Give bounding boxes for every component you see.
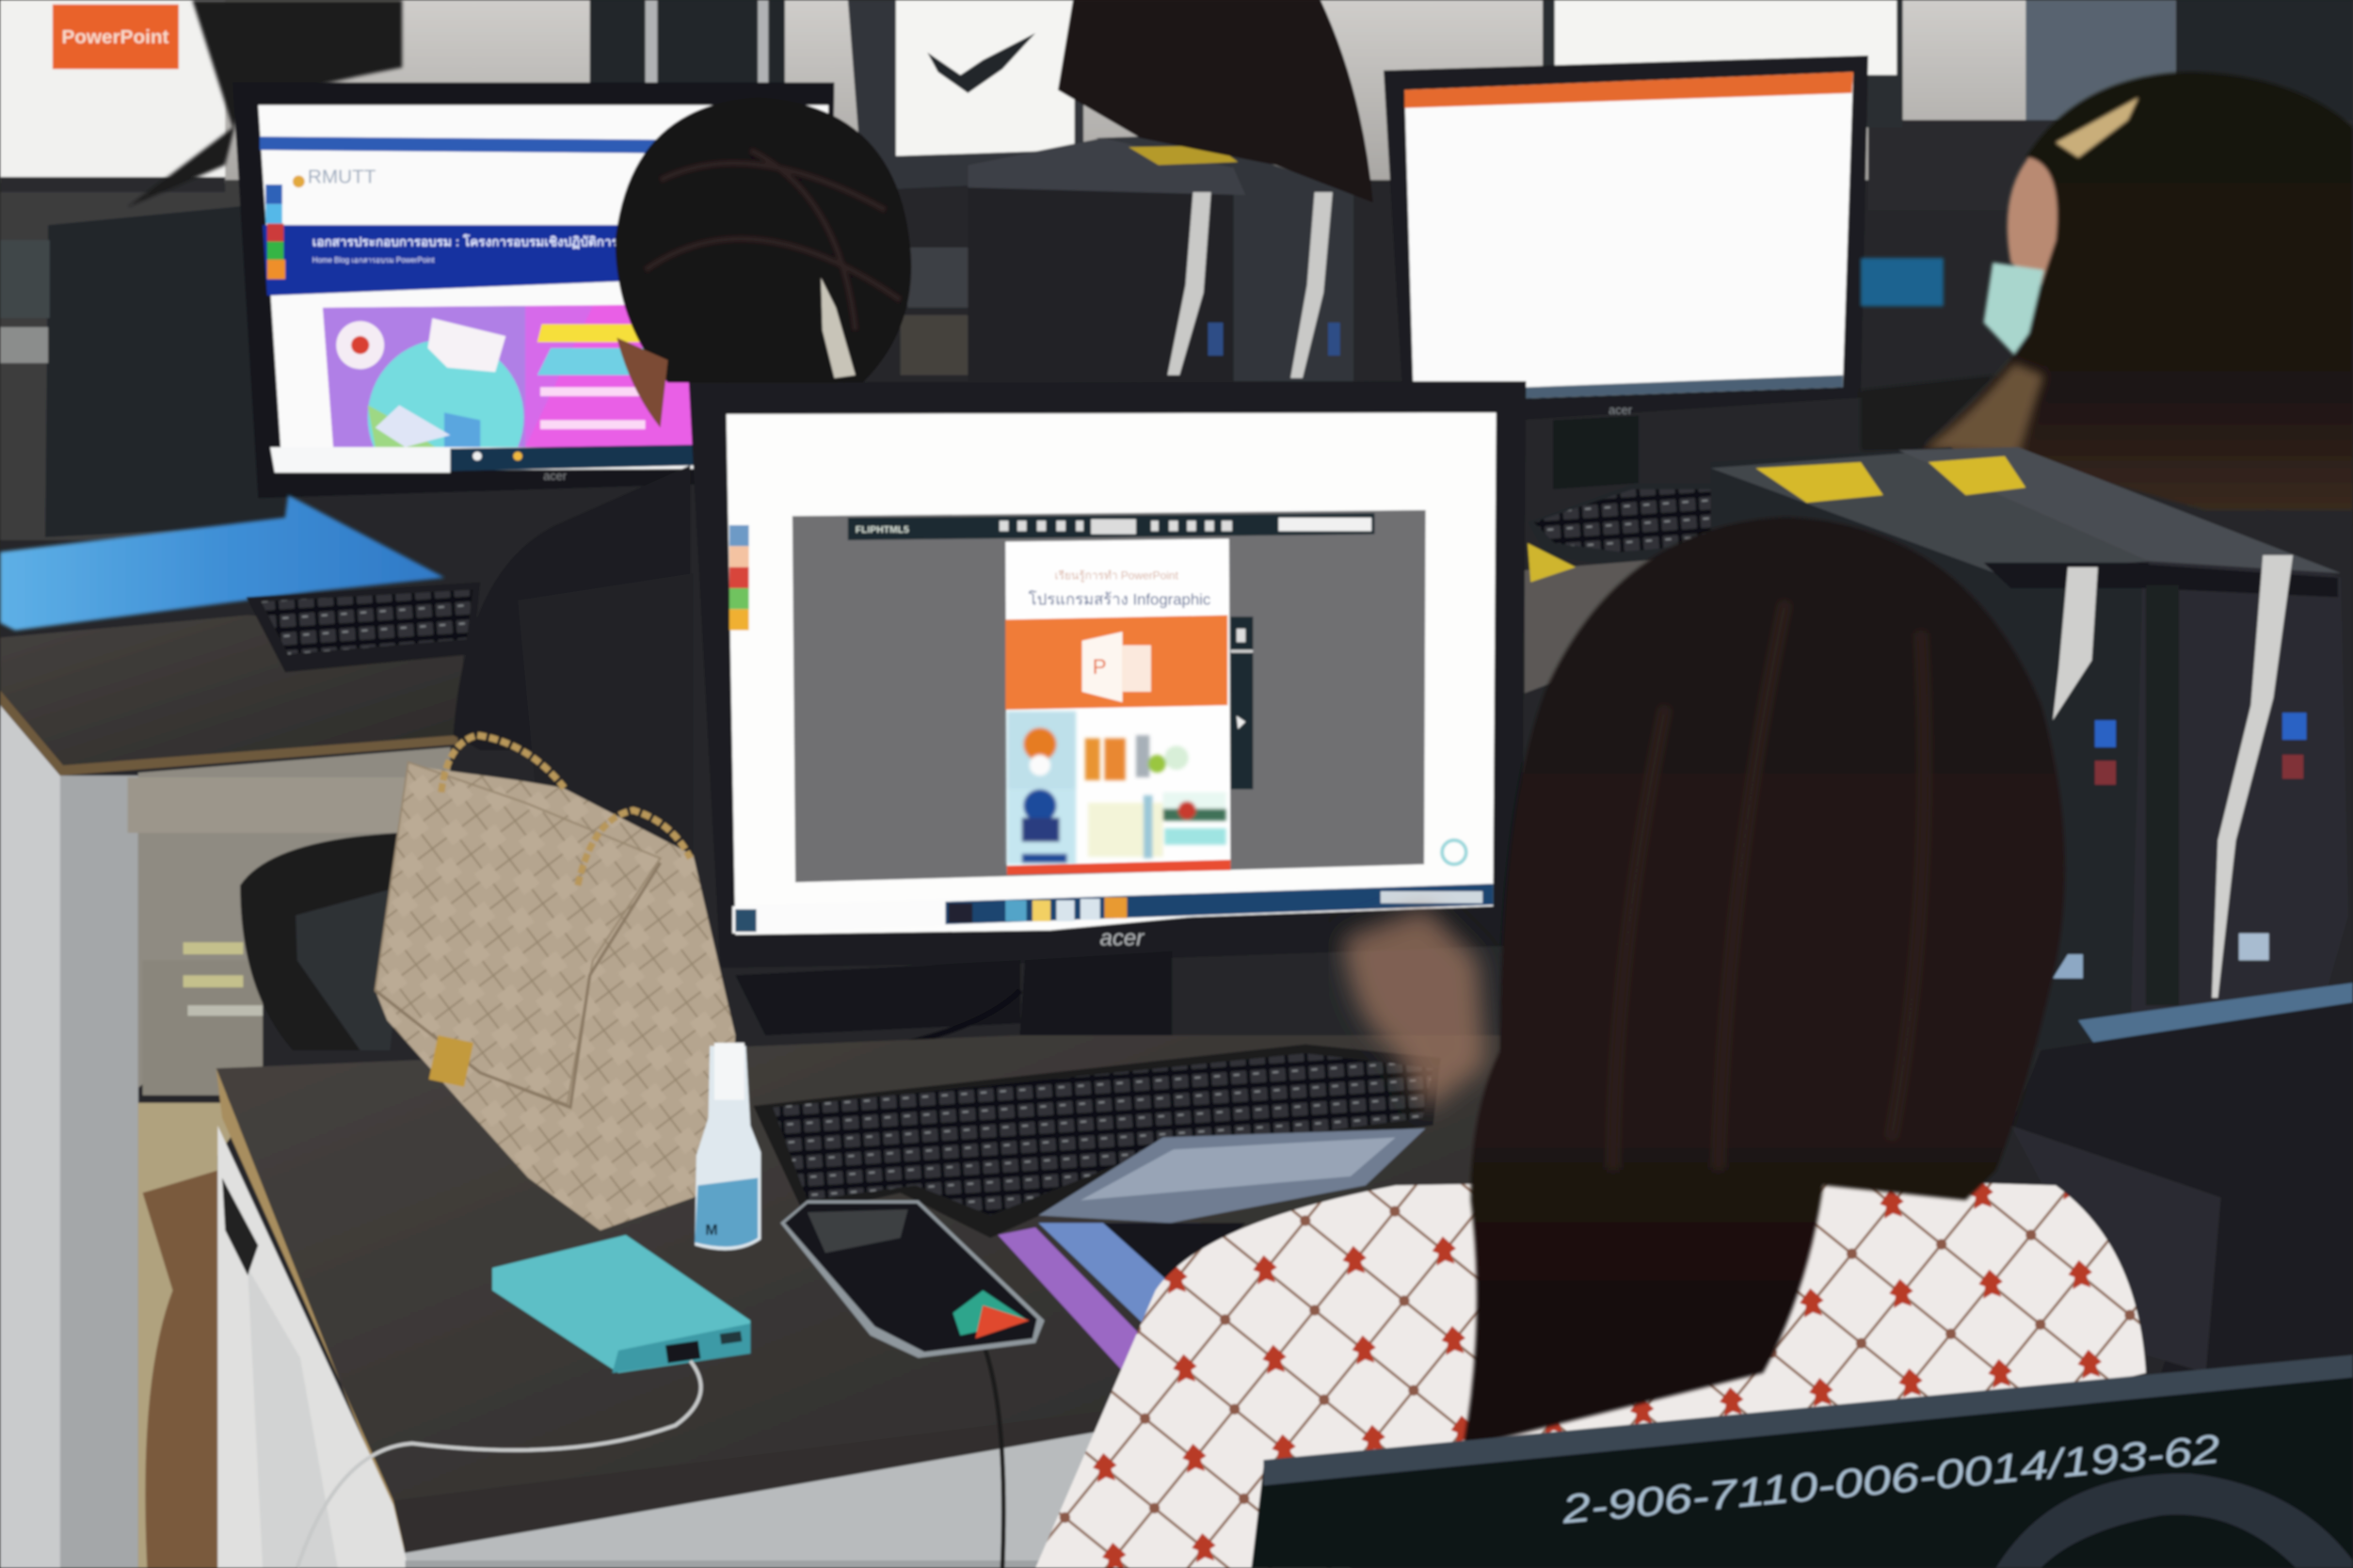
asset number label: 2-906-7110-006-0014/193-62 bbox=[1560, 1427, 2222, 1532]
monitor: website with purple banner bbox=[232, 83, 835, 498]
monitor: website with purple banner: Home Blog เอกสารอบรม PowerPoint bbox=[312, 256, 435, 264]
desk and keyboard behind, centre bbox=[901, 248, 975, 376]
viewer side arrows bbox=[1230, 616, 1253, 790]
blue folder on left desk bbox=[0, 495, 444, 631]
hand sanitizer bottle bbox=[695, 1043, 760, 1250]
main keyboard bbox=[753, 1045, 1441, 1238]
back-row monitor right bbox=[1543, 0, 1903, 128]
charging cables bbox=[297, 1343, 1003, 1568]
monitor: website with purple banner: acer bbox=[543, 469, 568, 483]
monitor back with asset tag bbox=[1252, 1355, 2353, 1568]
back-row person bbox=[128, 0, 402, 207]
far right computer towers bbox=[1711, 447, 2348, 1058]
banner illustration bbox=[322, 303, 695, 450]
PowerPoint logo bbox=[1082, 632, 1151, 702]
chair behind central monitor bbox=[518, 573, 694, 886]
back-row computer towers bbox=[590, 0, 785, 84]
acer logo: acer bbox=[1100, 925, 1144, 951]
monitor social sidebar bbox=[729, 525, 749, 631]
poster page: โปรแกรมสร้าง Infographic bbox=[1029, 589, 1210, 608]
poster page bbox=[1005, 538, 1230, 874]
woman's blouse bbox=[1035, 1177, 2146, 1568]
thumbnails bbox=[1007, 712, 1226, 864]
monitor: website with purple banner: เอกสารประกอบการอบรม : โครงการอบรมเชิงปฏิบัติการ bbox=[312, 232, 619, 249]
back wall desk, far right bbox=[2265, 510, 2353, 975]
left desk bbox=[0, 616, 465, 1568]
small back keyboard, left bbox=[0, 240, 50, 318]
flipbook viewer: FLIPHTML5 bbox=[856, 525, 909, 536]
social sidebar bbox=[265, 184, 285, 280]
computer towers, centre back bbox=[968, 135, 1353, 381]
centre chair seat and stool bbox=[240, 833, 406, 1050]
central monitor bbox=[689, 381, 1526, 968]
flipbook viewer bbox=[792, 510, 1426, 882]
back-row monitor with PowerPoint slide bbox=[0, 0, 225, 192]
poster page: เรียนรู้การทำ PowerPoint bbox=[1055, 568, 1179, 583]
monitor stand bbox=[1017, 952, 1172, 1068]
black desk items behind keyboard bbox=[735, 960, 1020, 1035]
monitor right: slide editor: acer bbox=[1609, 403, 1633, 417]
power bank bbox=[492, 1235, 750, 1373]
logo RMUTT: RMUTT bbox=[308, 166, 376, 187]
back-row monitor with PowerPoint slide: PowerPoint bbox=[61, 26, 169, 48]
chair, far left bbox=[45, 205, 285, 537]
front desk bbox=[216, 1035, 1500, 1568]
central monitor taskbar bbox=[732, 882, 1493, 934]
back desk and keyboard right bbox=[1525, 483, 1725, 694]
laptop on desk bbox=[998, 1128, 1426, 1378]
cable bbox=[750, 990, 1020, 1065]
monitor right: slide editor bbox=[1384, 56, 1868, 489]
handbag: beige quilted bag bbox=[376, 735, 735, 1230]
white wall strip back left bbox=[0, 328, 48, 363]
woman's long hair bbox=[1464, 518, 2064, 1448]
hand sanitizer bottle: M bbox=[705, 1223, 718, 1239]
front chair / black bag on the right bbox=[2010, 983, 2353, 1373]
loader ring bbox=[1442, 840, 1466, 864]
PowerPoint logo: P bbox=[1093, 655, 1107, 679]
woman in dark jacket, second row bbox=[454, 98, 911, 750]
smartphone bbox=[780, 1200, 1045, 1358]
woman with mask, right bbox=[1861, 72, 2353, 510]
woman's blurred hand bbox=[1343, 908, 1485, 1111]
keyboard on left desk bbox=[247, 583, 480, 672]
taskbar bbox=[270, 447, 450, 472]
bag clasp bbox=[429, 1035, 473, 1087]
back-row person hair bbox=[1058, 0, 1373, 202]
back-row monitor centre bbox=[848, 0, 1083, 190]
